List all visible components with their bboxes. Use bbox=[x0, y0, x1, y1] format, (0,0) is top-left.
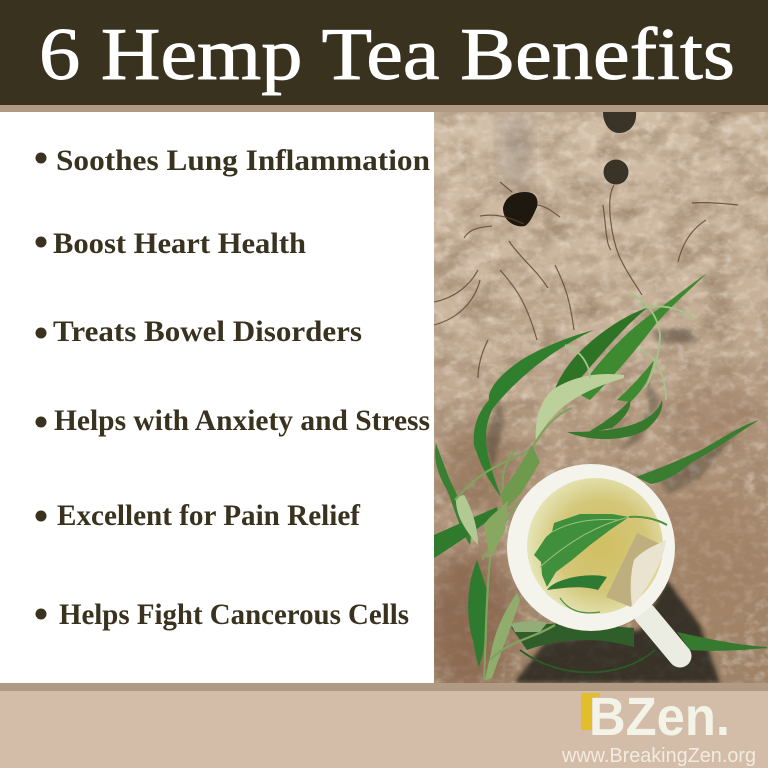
footer band bbox=[0, 683, 768, 768]
right blade bbox=[636, 420, 759, 484]
photo: hemp tea cup on wood bbox=[425, 108, 768, 690]
teacup bbox=[507, 464, 680, 656]
tea bbox=[527, 478, 663, 614]
stem cluster bbox=[455, 408, 572, 680]
floating leaf bbox=[534, 514, 667, 613]
cup rim bbox=[507, 464, 675, 631]
benefit: cancerous cells: Helps Fight Cancerous Cells bbox=[59, 598, 409, 631]
lower right blades bbox=[677, 632, 767, 651]
left curved blade bbox=[474, 330, 594, 497]
upper blades bbox=[577, 273, 707, 400]
wood holes bbox=[503, 112, 636, 226]
website url: www.BreakingZen.org bbox=[561, 745, 756, 767]
benefit: anxiety and stress: Helps with Anxiety and Stress bbox=[54, 404, 430, 437]
wood surface bbox=[425, 108, 768, 690]
benefit: heart health: Boost Heart Health bbox=[53, 227, 306, 260]
cup and leaf shadow bbox=[485, 328, 740, 683]
curling tendrils bbox=[565, 293, 695, 400]
tea bag bbox=[606, 533, 666, 607]
benefit: bowel disorders: Treats Bowel Disorders bbox=[53, 315, 362, 348]
benefit: lung inflammation: Soothes Lung Inflammation bbox=[56, 144, 430, 177]
logo: BZen: BZen. bbox=[589, 687, 730, 747]
title: 6 Hemp Tea Benefits bbox=[39, 14, 735, 96]
left blades bbox=[435, 443, 471, 545]
benefit: pain relief: Excellent for Pain Relief bbox=[57, 499, 361, 532]
header band bbox=[0, 0, 768, 112]
cup handle bbox=[645, 614, 680, 656]
wood cracks bbox=[434, 182, 738, 378]
pale leaf bbox=[536, 374, 624, 445]
hemp leaves bbox=[434, 273, 767, 680]
benefits list bbox=[36, 144, 430, 631]
